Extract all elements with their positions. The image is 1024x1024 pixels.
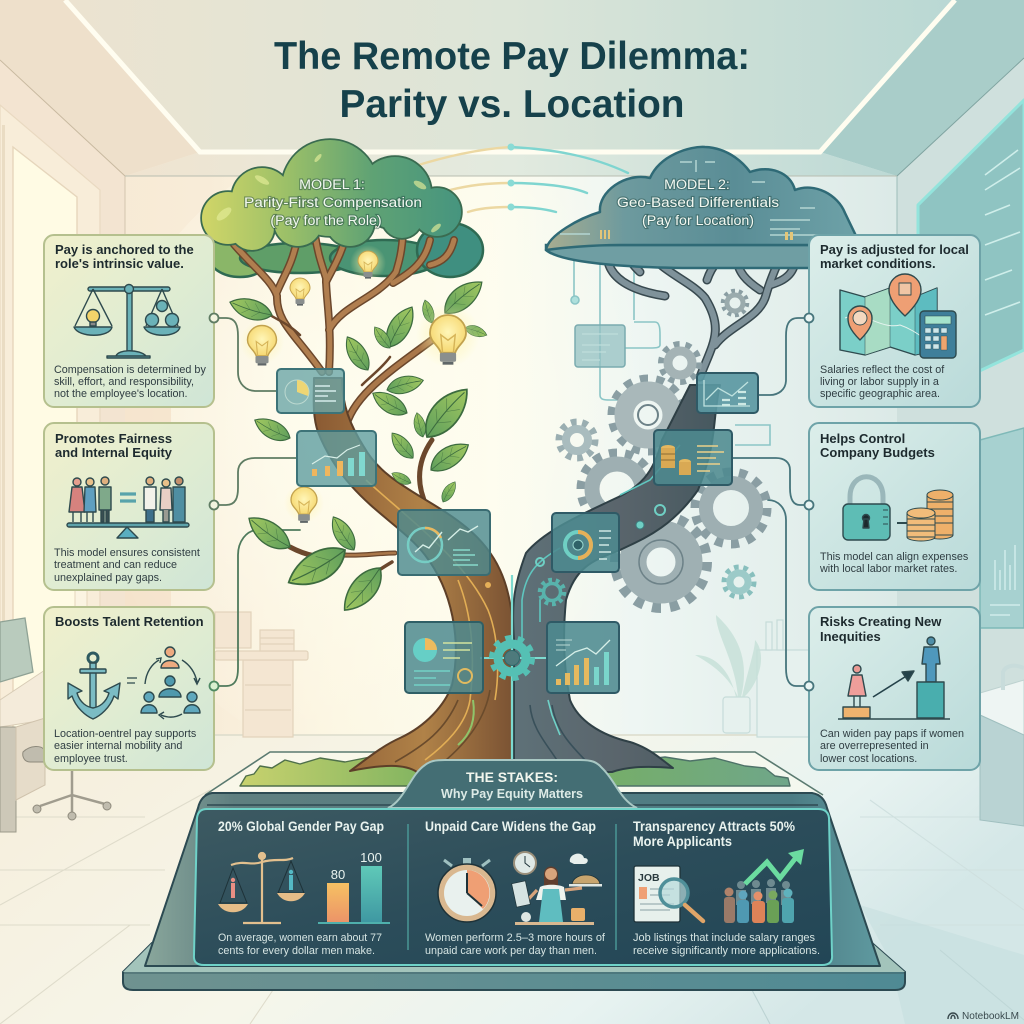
watermark: NotebookLM [962,1010,1019,1022]
canopy right: model 2 [546,147,860,268]
icon: padlock and coins [843,477,953,541]
right desk [980,680,1024,735]
panel: retention: Boosts Talent Retention [55,614,204,629]
panel: pay anchored: Compensation is determined by [54,364,206,376]
icon: job listing with magnifier [634,866,703,922]
dashboard: ring [552,513,619,572]
panel: risks: Inequities [820,629,881,644]
branches [607,247,797,377]
chart: pay bars [318,850,390,923]
panel: pay anchored: Pay is anchored to the [55,242,194,257]
panel: fairness: and Internal Equity [55,445,173,460]
stat: unpaid care: unpaid care work per day than men. [425,945,597,957]
icon: woman with care tasks [512,852,602,925]
network lines between canopies [412,144,628,212]
connector node [210,500,218,510]
back plant and shelf [723,620,810,737]
connector node [804,682,814,690]
icon: anchor [68,653,120,719]
panel: pay anchored: skill, effort, and responsibility, [54,376,194,388]
canopy label [617,177,779,229]
gears back [559,291,767,608]
connector lines left [216,318,300,686]
panel: budgets: Company Budgets [820,445,935,460]
platform slab [123,943,905,990]
stat: gender pay gap [218,818,390,957]
connector lines right [732,318,807,686]
icon: people cycle [127,647,200,719]
canopy label: MODEL 2: [664,177,730,193]
panel: local market: market conditions. [820,256,936,271]
stat: transparency: More Applicants [633,833,732,849]
panel: fairness: treatment and can reduce [54,559,177,571]
panel: local market [804,235,980,407]
panel: budgets: Helps Control [820,431,905,446]
platform body [145,793,880,966]
panel: pay anchored [44,235,218,407]
panel: risks: lower cost locations. [820,753,917,765]
panel: retention: easier internal mobility and [54,740,182,752]
stat: transparency: receive significantly more applications. [633,945,820,957]
panel: risks: are overrepresented in [820,740,929,752]
left desk area [0,618,33,682]
panel: fairness [44,423,218,590]
stakes panel [194,809,832,965]
dashboard: growth [547,622,619,693]
trunk [513,385,720,772]
canopy left: model 1 [202,140,461,250]
stat: gender pay gap: 20% Global Gender Pay Gap [218,818,384,834]
dashboard: coins [654,430,732,485]
small teal gear [540,580,564,604]
connector node [210,682,218,690]
canopy label: Geo-Based Differentials [617,195,779,211]
canopy back left [208,223,483,277]
panel: local market: specific geographic area. [820,388,940,400]
icon: tilted scale [218,852,305,923]
panel: fairness: Promotes Fairness [55,431,172,446]
panel: budgets [804,423,980,590]
dashboard: gauge [398,510,490,575]
title [274,35,750,126]
icon: job listing with magnifier: JOB [638,872,660,884]
leaves [227,274,489,618]
panel: local market: Pay is adjusted for local [820,242,969,257]
panel: risks: Risks Creating New [820,614,942,629]
back cabinet and printer [215,612,308,737]
dashboard: charts [697,373,758,413]
panel: budgets: with local labor market rates. [819,563,957,575]
title: The Remote Pay Dilemma: [274,35,750,78]
canopy label: (Pay for Location) [642,213,754,229]
panel: retention [44,607,218,770]
tree right: geo [513,247,797,772]
chart: pay bars: 80 [331,867,345,882]
connector node [804,500,814,510]
dashboard: faint list [575,325,625,367]
stat: gender pay gap: On average, women earn about 77 [218,932,382,944]
canopy label: Parity-First Compensation [244,195,422,211]
canopy label: (Pay for the Role) [270,213,382,229]
panel: budgets: This model can align expenses [820,551,969,563]
icon: applicant crowd and arrow [724,849,804,923]
panel: risks: Can widen pay paps if women [820,728,964,740]
stat: transparency [633,818,820,957]
planter tray and grass [205,752,823,795]
title: Parity vs. Location [340,83,684,126]
lightbulbs [240,245,480,523]
panel: pay anchored: not the employee's location. [54,388,188,400]
panel: local market: living or labor supply in a [820,376,939,388]
circuit lines [571,250,770,445]
dashboards on trees [277,325,758,693]
center seam and gear [480,575,548,775]
dashboard: pie lower [405,622,483,693]
icon: stopwatch [438,858,496,922]
stat: unpaid care: Unpaid Care Widens the Gap [425,818,596,834]
panel: pay anchored: role's intrinsic value. [55,256,184,271]
stat: unpaid care [425,818,606,957]
stat: unpaid care: Women perform 2.5–3 more hours of [425,932,606,944]
dashboard: bars [297,431,376,486]
panel: risks [804,607,980,770]
stakes heading tab: THE STAKES: [466,770,558,785]
panel: local market: Salaries reflect the cost of [820,364,945,376]
panel: retention: employee trust. [54,753,128,765]
stakes heading tab: Why Pay Equity Matters [441,787,583,801]
platform: the stakes [123,760,905,990]
icon: balanced people [67,477,189,538]
canopy label [244,177,422,229]
tree left: parity [227,232,514,772]
panel: retention: Location-oentrel pay supports [54,728,197,740]
chart: pay bars: 100 [360,850,382,865]
branches [232,232,454,580]
connector node [804,314,814,322]
icon: balance scale [74,284,180,358]
stat: transparency: Job listings that include salary ranges [633,932,815,944]
panel: fairness: unexplained pay gaps. [54,572,162,584]
connector node [210,314,218,322]
trunk [314,378,514,772]
canopy label: MODEL 1: [299,177,365,193]
panel: fairness: This model ensures consistent [54,547,200,559]
stat: gender pay gap: cents for every dollar men make. [218,945,375,957]
stakes heading tab [388,760,637,808]
dashboard: pie [277,369,344,413]
stat: transparency: Transparency Attracts 50% [633,818,795,834]
icon: uneven pedestals [838,637,950,719]
icon: map, pins and calculator [840,274,956,358]
